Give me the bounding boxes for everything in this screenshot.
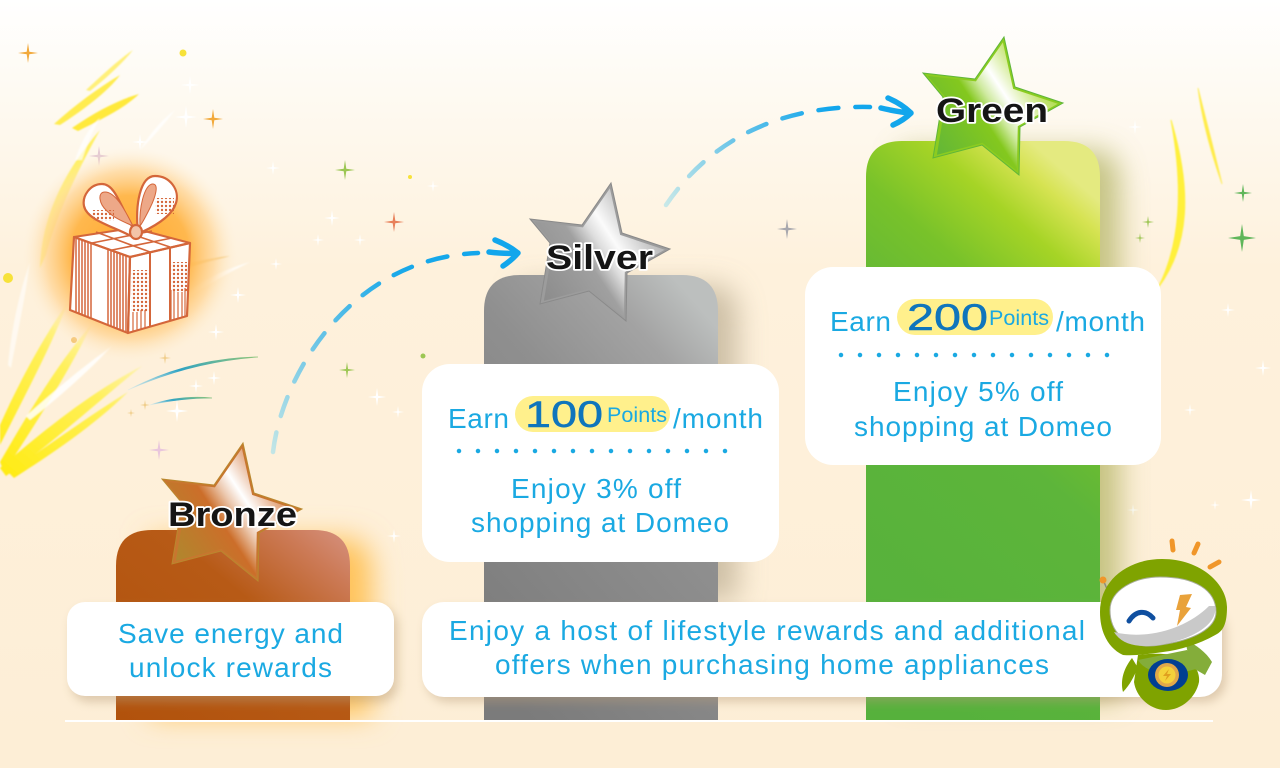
robot head (1100, 559, 1227, 655)
robot lightning bolt (1176, 594, 1192, 626)
bronze label: Bronze (168, 496, 297, 534)
silver points line: Points (607, 404, 667, 427)
robot winking eye (1129, 612, 1153, 621)
green bar (866, 141, 1100, 720)
green points line: 200 (907, 297, 988, 338)
gift bow (84, 176, 177, 239)
green discount text (854, 376, 1112, 442)
silver discount text: shopping at Domeo (471, 507, 729, 538)
green discount text: shopping at Domeo (854, 411, 1112, 442)
dotted divider (841, 353, 1126, 357)
green points line: /month (1056, 306, 1145, 337)
icon: robot mascot (1100, 541, 1227, 710)
silver discount text (471, 473, 729, 538)
silver bar (484, 275, 718, 720)
fireworks right (1158, 88, 1222, 288)
bronze description text: Save energy and (118, 618, 343, 649)
panel: lifestyle rewards description (422, 602, 1226, 702)
silver points line (448, 394, 763, 435)
baseline (65, 720, 1213, 722)
bronze description text (118, 618, 343, 683)
icon: silver star (530, 183, 670, 321)
bronze description text: unlock rewards (129, 652, 332, 683)
icon: bronze star (162, 443, 302, 581)
silver points line: /month (673, 403, 763, 434)
dotted divider (459, 449, 744, 453)
silver points line: 100 (525, 394, 603, 435)
gift box icon (30, 154, 232, 354)
silver discount text: Enjoy 3% off (511, 473, 681, 504)
panel: green benefits (805, 267, 1161, 465)
robot antenna (1100, 576, 1110, 596)
bronze bar glow (150, 538, 372, 716)
panel: silver benefits (422, 364, 779, 562)
icon: green star (923, 37, 1063, 175)
green label: Green (936, 92, 1048, 130)
green points line: Points (989, 307, 1049, 330)
green points line: Earn (830, 306, 891, 337)
silver label: Silver (546, 239, 653, 277)
robot face (1110, 577, 1216, 646)
lifestyle rewards text: Enjoy a host of lifestyle rewards and additional (449, 615, 1085, 646)
fireworks left (0, 50, 258, 478)
green bar shadow (900, 150, 1120, 700)
silver bar shadow (520, 285, 738, 600)
panel: bronze description (67, 602, 398, 702)
bronze bar (116, 530, 350, 720)
sparkles (3, 43, 1271, 543)
lifestyle rewards text (449, 615, 1085, 680)
green points line (830, 297, 1145, 338)
green discount text: Enjoy 5% off (893, 376, 1063, 407)
dashed arrow: silver to green (666, 98, 911, 205)
lifestyle rewards text: offers when purchasing home appliances (495, 649, 1049, 680)
robot body (1122, 640, 1212, 710)
robot face shade (1114, 606, 1215, 646)
dashed arrow: bronze to silver (273, 240, 518, 452)
silver points line: Earn (448, 403, 509, 434)
robot signal rays (1172, 541, 1219, 567)
gift box faces (70, 228, 190, 335)
